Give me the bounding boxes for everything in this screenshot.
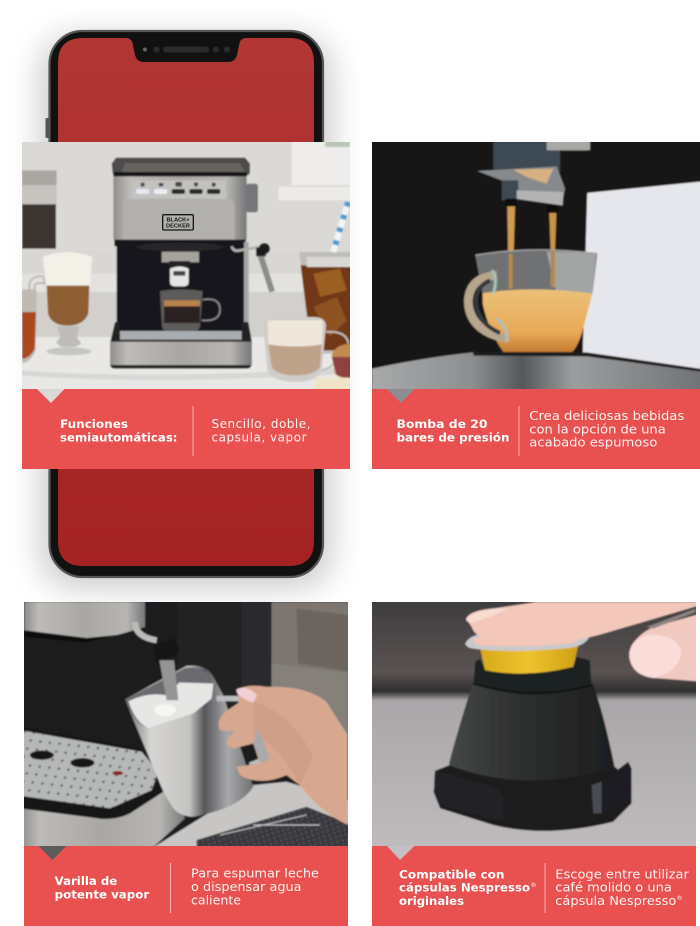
photo: frothing milk with steam wand — [24, 602, 348, 846]
heading: originales — [399, 894, 464, 908]
band pointer — [387, 846, 414, 860]
coffee — [483, 289, 592, 352]
group head — [493, 140, 560, 172]
caption band — [372, 846, 696, 926]
heading: Varilla de — [55, 874, 117, 888]
finger — [466, 602, 700, 644]
pitcher handle — [217, 699, 267, 765]
description — [555, 867, 689, 908]
band pointer — [38, 846, 66, 860]
panel: bomba de presion — [360, 140, 700, 469]
wand — [232, 246, 260, 251]
description: café molido o una — [555, 881, 672, 895]
heading: semiautomáticas: — [60, 430, 178, 444]
photo: espresso pouring into glass cup — [372, 142, 700, 389]
towel — [197, 807, 353, 848]
heading: potente vapor — [55, 887, 149, 901]
heading: Compatible con — [399, 867, 504, 881]
cup glass — [475, 250, 597, 294]
description: Crea deliciosas bebidas — [529, 409, 684, 423]
rear finger — [629, 612, 700, 682]
steel top — [24, 602, 145, 639]
adapter base — [433, 765, 632, 831]
heading — [396, 417, 510, 444]
hand — [219, 686, 348, 825]
brand logo — [163, 215, 193, 230]
panel: varilla de vapor — [20, 595, 353, 926]
phone body — [50, 31, 323, 577]
pitcher — [125, 666, 253, 817]
description: capsula, vapor — [212, 430, 307, 444]
heading: ® — [530, 882, 536, 889]
base steel — [20, 785, 185, 848]
description: con la opción de una — [529, 422, 666, 436]
iced glass — [299, 252, 353, 354]
caption band — [24, 846, 348, 926]
description: Escoge entre utilizar — [555, 867, 689, 881]
muffin — [332, 344, 353, 380]
handle — [468, 275, 507, 339]
streams — [507, 206, 515, 289]
heading — [55, 874, 149, 901]
description: ® — [676, 895, 682, 902]
latte glass — [29, 276, 45, 292]
caption band — [372, 389, 700, 469]
description: o dispensar agua — [191, 880, 302, 894]
phone mockup — [40, 31, 332, 588]
description: caliente — [191, 893, 241, 907]
panel: funciones semiautomaticas — [20, 140, 355, 469]
description: Para espumar leche — [191, 867, 319, 881]
brand logo: DECKER — [166, 224, 190, 230]
capsule — [479, 645, 578, 674]
description: Sencillo, doble, — [212, 417, 310, 431]
phone speaker and sensors — [143, 46, 230, 52]
description — [529, 409, 684, 450]
description — [212, 417, 310, 444]
tea glass — [22, 289, 37, 363]
description: acabado espumoso — [529, 436, 657, 450]
tray and base — [110, 322, 252, 369]
adapter cone — [448, 684, 617, 782]
portafilter handle — [561, 140, 700, 193]
heading: Bomba de 20 — [396, 417, 488, 431]
straw — [333, 202, 348, 252]
phone shadow — [40, 36, 332, 588]
heading: bares de presión — [396, 430, 510, 444]
panel: compatible con capsulas — [360, 595, 700, 926]
band pointer — [387, 389, 414, 403]
counter — [152, 782, 353, 848]
caption band — [22, 389, 350, 469]
brand logo: BLACK+ — [166, 217, 190, 223]
band pointer — [37, 389, 64, 403]
description: cápsula Nespresso — [555, 894, 676, 908]
adapter collar — [473, 657, 592, 697]
wand — [135, 622, 157, 640]
heading: Funciones — [60, 417, 128, 431]
heading — [399, 867, 536, 908]
phone screen — [58, 38, 314, 566]
drip tray — [20, 727, 167, 819]
phone side button — [46, 118, 50, 138]
cup — [160, 289, 203, 334]
machine — [112, 158, 250, 177]
photo: capsule adapter pressed by finger — [372, 602, 696, 846]
description — [191, 867, 319, 907]
cappuccino — [263, 317, 326, 382]
photo: coffee machine on counter — [22, 142, 350, 389]
heading — [60, 417, 178, 444]
heading: cápsulas Nespresso — [399, 881, 530, 895]
